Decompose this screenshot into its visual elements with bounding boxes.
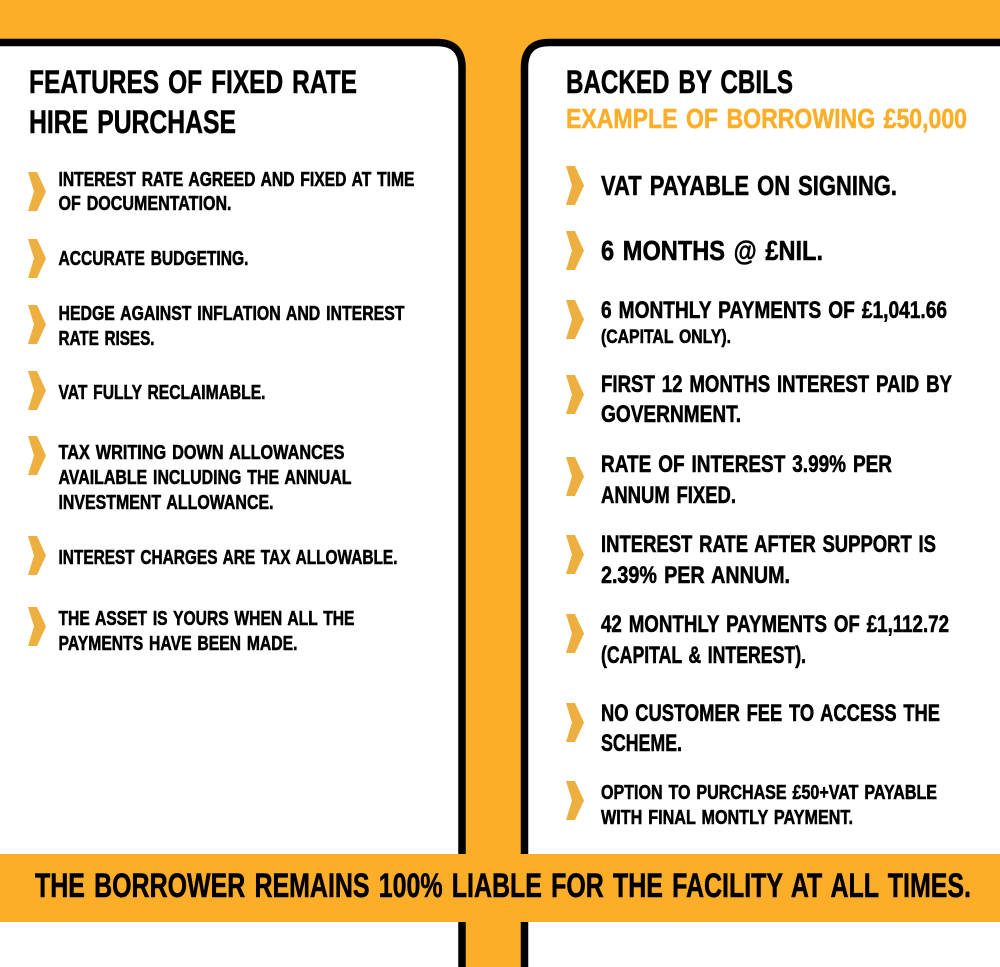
item: vat payable on signing: VAT PAYABLE ON SIGNING. <box>601 170 897 201</box>
item: rate of interest <box>566 451 892 509</box>
item: hedge against inflation: RATE RISES. <box>58 328 154 350</box>
item: no customer fee <box>566 700 940 757</box>
item: first 12 months interest <box>566 371 952 428</box>
item: first 12 months interest: GOVERNMENT. <box>601 401 741 428</box>
item: asset is yours: THE ASSET IS YOURS WHEN ALL THE <box>58 608 354 630</box>
panel: backed by CBILS <box>524 42 1000 967</box>
item: hedge against inflation: HEDGE AGAINST INFLATION AND INTEREST <box>58 303 404 325</box>
item: tax writing down allowances: TAX WRITING DOWN ALLOWANCES <box>58 442 344 464</box>
item: no customer fee: SCHEME. <box>601 730 682 757</box>
item: accurate budgeting <box>28 239 248 278</box>
item: 6 months at nil <box>566 231 823 270</box>
item: asset is yours: PAYMENTS HAVE BEEN MADE. <box>58 633 298 655</box>
item: 6 monthly payments <box>566 297 947 348</box>
item: tax writing down allowances: INVESTMENT ALLOWANCE. <box>58 492 274 514</box>
item: asset is yours <box>28 607 354 655</box>
item: interest rate after support: 2.39% PER ANNUM. <box>601 562 790 589</box>
item: option to purchase <box>566 781 937 829</box>
item: tax writing down allowances: AVAILABLE INCLUDING THE ANNUAL <box>58 467 352 489</box>
item: vat payable on signing <box>566 166 897 205</box>
item: tax writing down allowances <box>28 436 352 514</box>
item: interest rate agreed: OF DOCUMENTATION. <box>58 193 232 215</box>
item: accurate budgeting: ACCURATE BUDGETING. <box>58 248 248 270</box>
item: vat fully reclaimable: VAT FULLY RECLAIMABLE. <box>58 382 266 404</box>
heading: features: FEATURES OF FIXED RATE <box>29 64 357 100</box>
item: 42 monthly payments: (CAPITAL & INTEREST). <box>601 642 806 669</box>
item: rate of interest: ANNUM FIXED. <box>601 482 736 509</box>
item: interest rate after support <box>566 531 936 589</box>
item: 6 monthly payments: (CAPITAL ONLY). <box>601 327 731 348</box>
item: 6 months at nil: 6 MONTHS @ £NIL. <box>601 235 823 266</box>
item: vat fully reclaimable <box>28 371 266 410</box>
item: hedge against inflation <box>28 303 404 350</box>
panel: features of fixed rate hire purchase <box>0 42 462 967</box>
item: interest rate agreed <box>28 169 414 215</box>
item: interest charges: INTEREST CHARGES ARE TAX ALLOWABLE. <box>58 547 398 569</box>
item: rate of interest: RATE OF INTEREST 3.99% PER <box>601 451 892 478</box>
heading: backed by CBILS: BACKED BY CBILS <box>566 64 793 100</box>
item: 42 monthly payments <box>566 611 949 669</box>
banner: borrower liability <box>0 854 1000 922</box>
item: option to purchase: WITH FINAL MONTLY PAYMENT. <box>601 807 853 829</box>
item: interest rate agreed: INTEREST RATE AGREED AND FIXED AT TIME <box>58 169 414 191</box>
item: interest charges <box>28 536 398 575</box>
heading: features: HIRE PURCHASE <box>29 104 236 140</box>
heading: features <box>29 64 357 140</box>
